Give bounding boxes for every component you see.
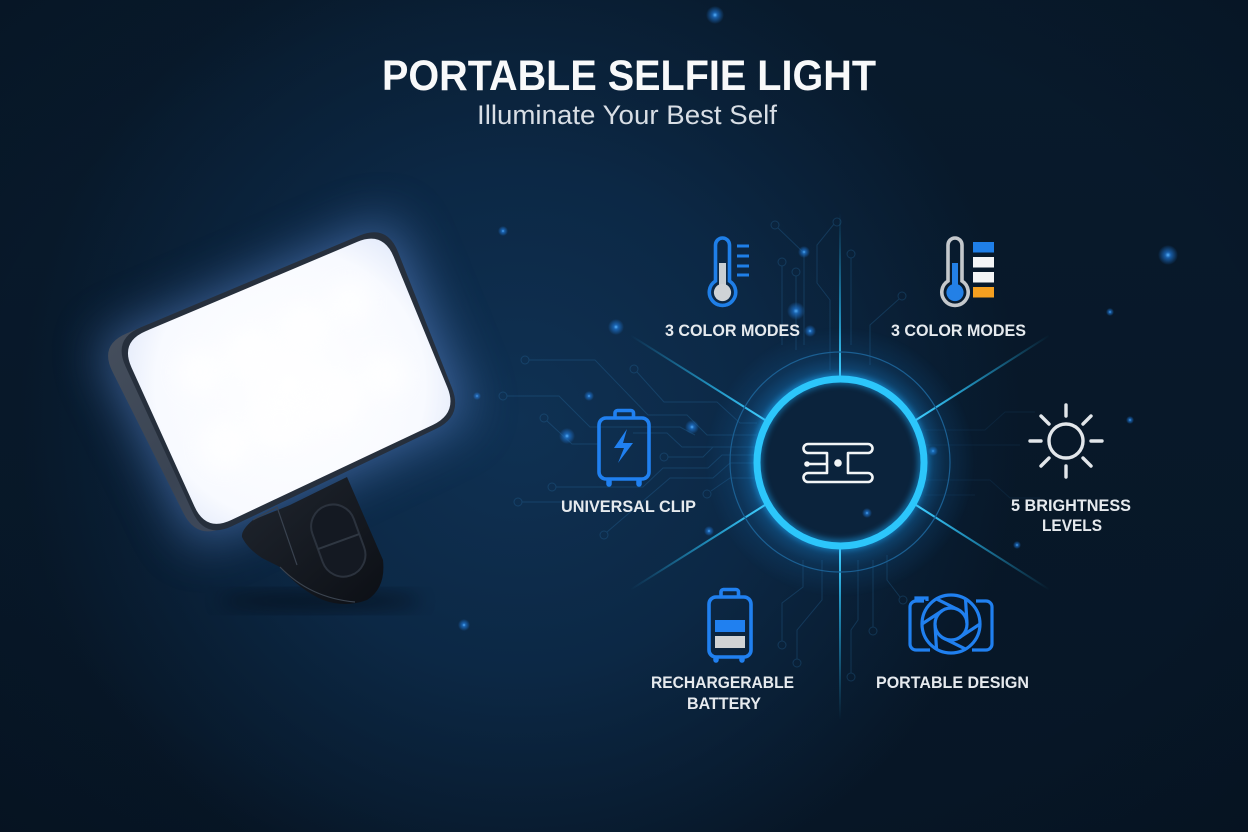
subtitle: Illuminate Your Best Self [477, 100, 777, 130]
icon: camera aperture [910, 595, 992, 653]
icon: power case with bolt [599, 410, 649, 484]
feature: rechargeable battery: BATTERY [687, 694, 762, 713]
feature: portable design [876, 595, 1029, 692]
glowing particles [458, 6, 1178, 631]
label: RECHARGERABLE [651, 673, 794, 692]
housing [108, 233, 455, 531]
clip [242, 477, 383, 604]
feature: 5 brightness levels: LEVELS [1042, 516, 1102, 535]
ground shadow [220, 592, 420, 610]
label: 3 COLOR MODES [891, 321, 1026, 340]
feature: 3 color modes (blue thermometer) [665, 238, 800, 340]
circuit traces [499, 218, 1040, 681]
light halo [99, 220, 470, 545]
LED hot spots [176, 280, 409, 471]
title: PORTABLE SELFIE LIGHT [382, 52, 876, 100]
icon: thermometer with ticks [709, 238, 749, 305]
icon: circuit chip [804, 444, 872, 482]
front bezel [122, 232, 455, 530]
label: 3 COLOR MODES [665, 321, 800, 340]
label: PORTABLE DESIGN [876, 673, 1029, 692]
central hub [730, 352, 950, 572]
feature: rechargeable battery [651, 590, 794, 713]
feature: universal clip [561, 410, 696, 516]
icon: sun [1030, 405, 1102, 477]
label: UNIVERSAL CLIP [561, 497, 696, 516]
ring glow [705, 327, 975, 597]
radial rays [630, 212, 1050, 720]
icon: battery [709, 590, 751, 660]
lit panel [128, 239, 450, 524]
product: selfie light [99, 220, 470, 610]
feature: 5 brightness levels [1011, 405, 1131, 535]
feature: 3 color modes (colour bars) [891, 238, 1026, 340]
label: 5 BRIGHTNESS [1011, 496, 1131, 515]
icon: thermometer with colour bars [942, 238, 994, 305]
